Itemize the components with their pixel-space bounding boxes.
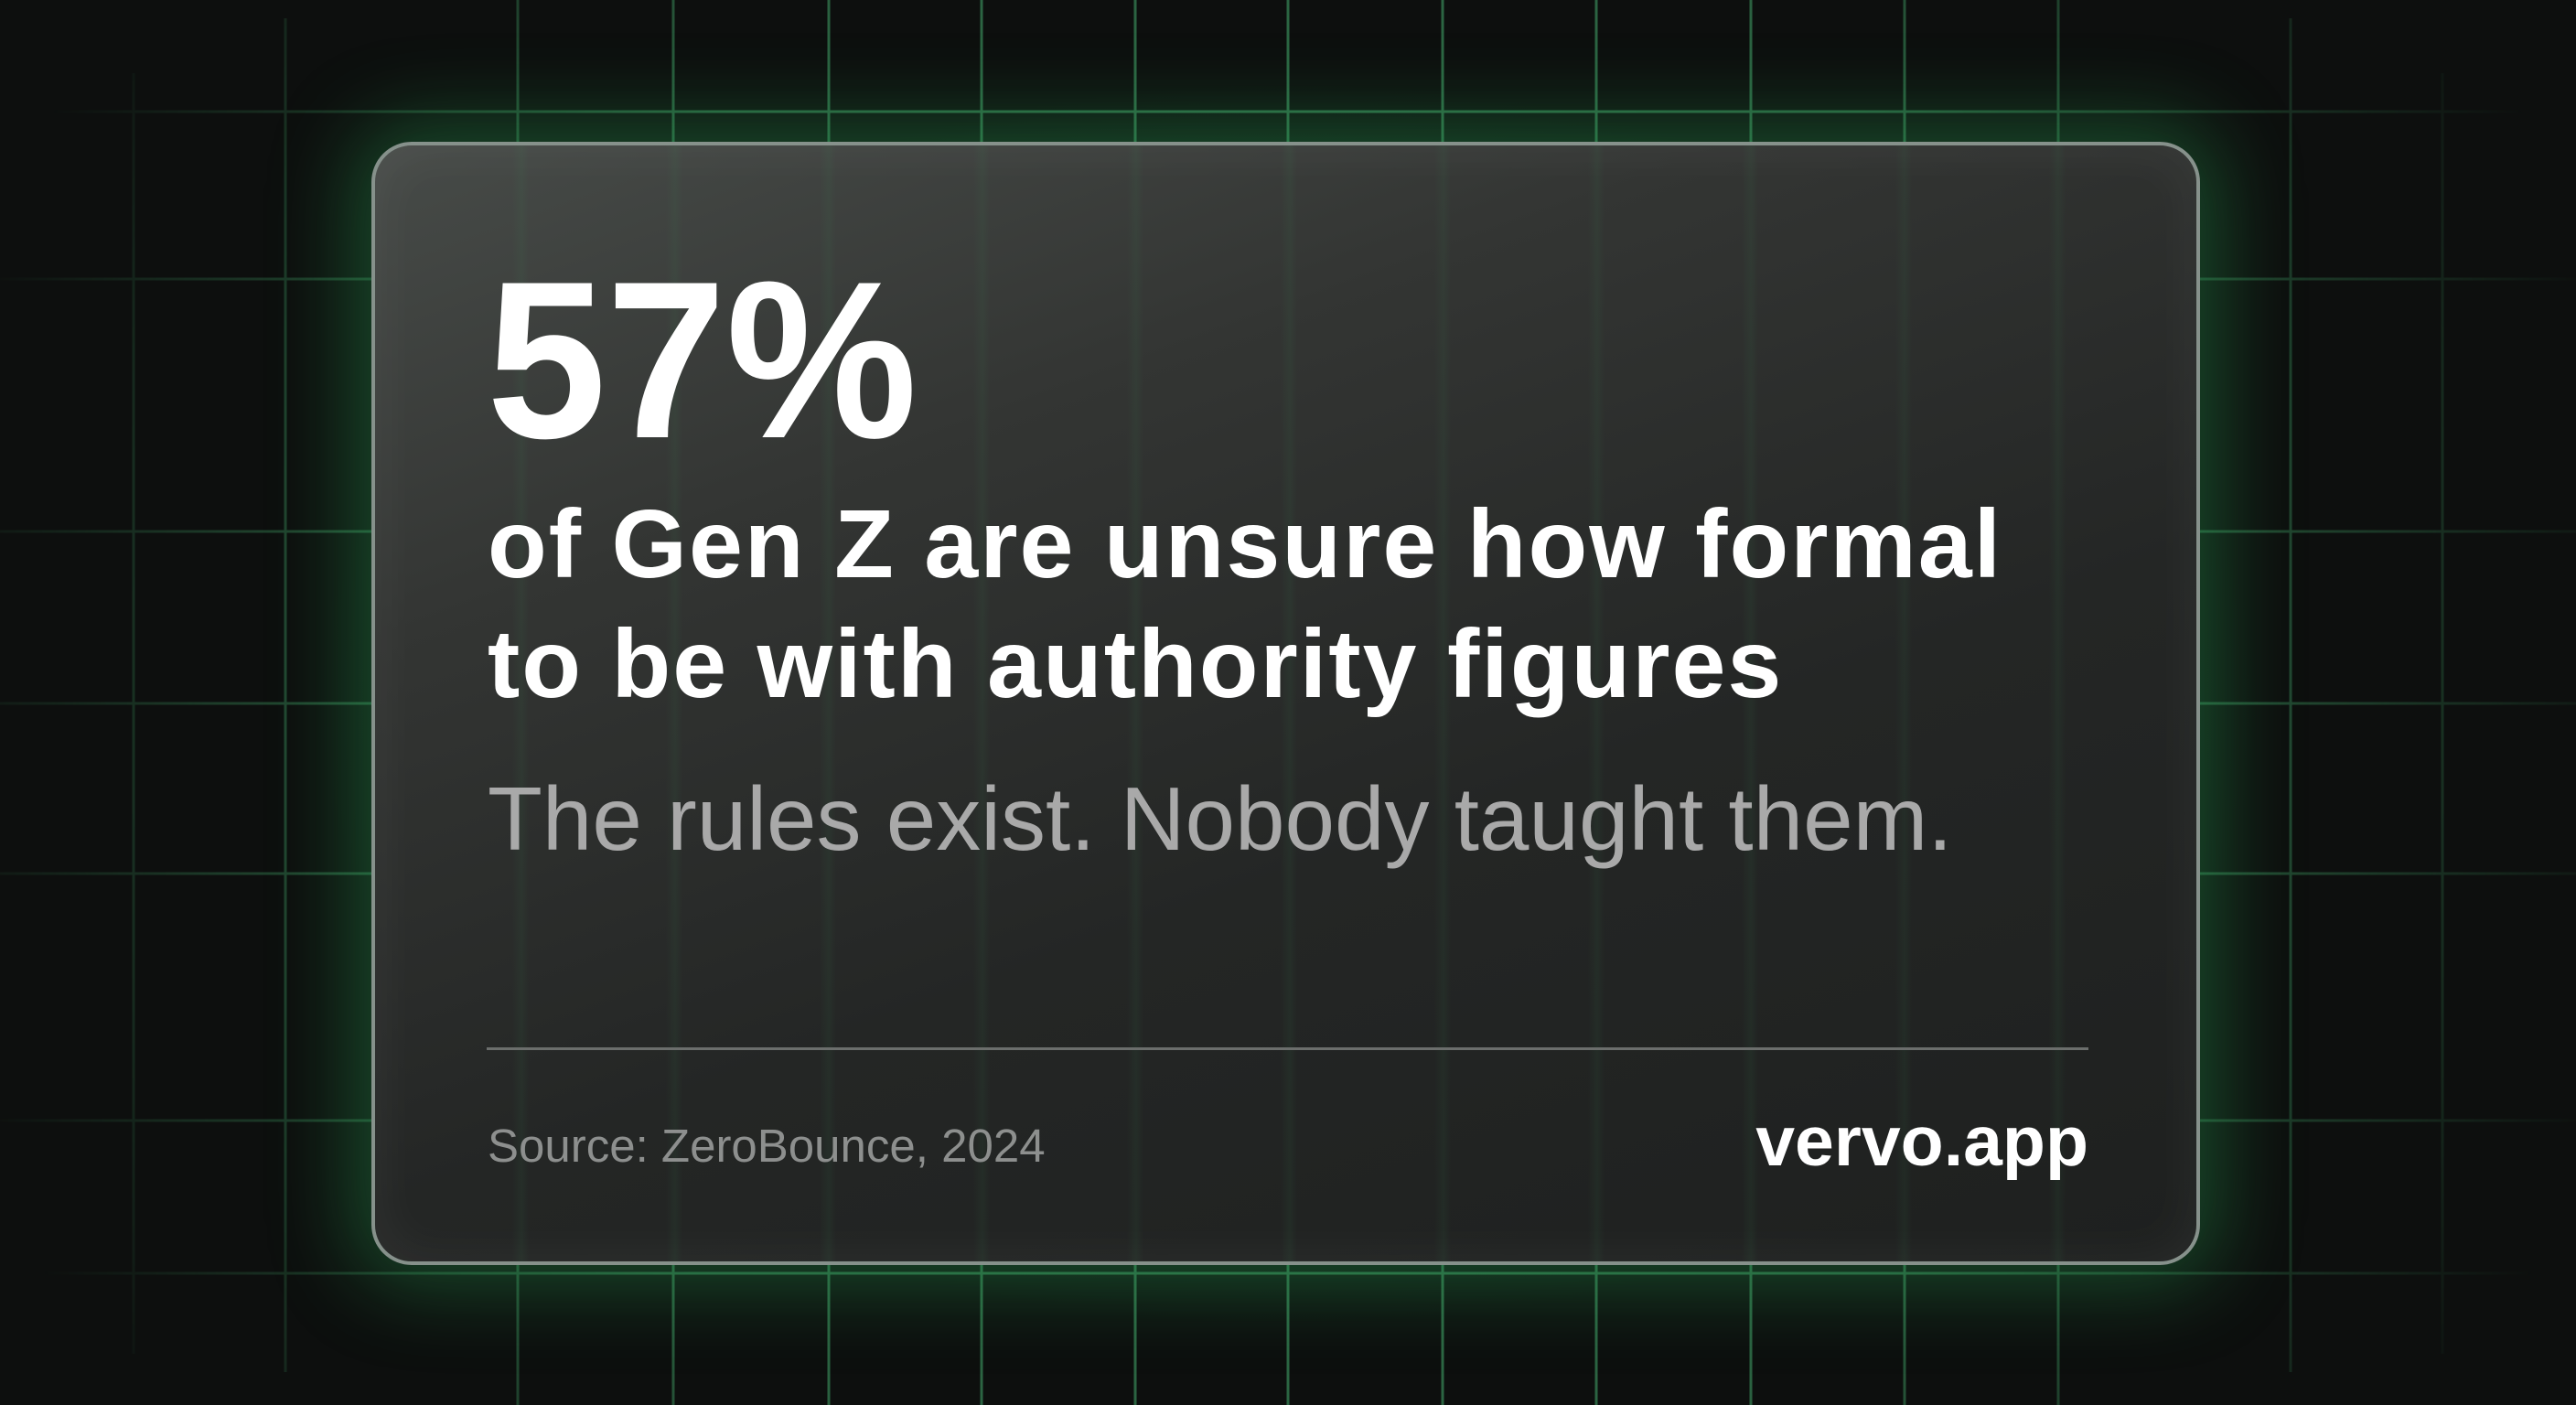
headline: of Gen Z are unsure how formal <box>488 490 2002 598</box>
divider <box>487 1047 2088 1050</box>
faint grid inside card <box>375 145 2196 1261</box>
headline <box>488 490 2002 718</box>
source text: Source: ZeroBounce, 2024 <box>488 1120 1046 1172</box>
brand url: vervo.app <box>1755 1102 2088 1181</box>
headline: to be with authority figures <box>488 610 1783 718</box>
subtitle: The rules exist. Nobody taught them. <box>488 768 1952 869</box>
panel: stat card <box>371 142 2200 1265</box>
big stat number: 57% <box>487 234 918 485</box>
